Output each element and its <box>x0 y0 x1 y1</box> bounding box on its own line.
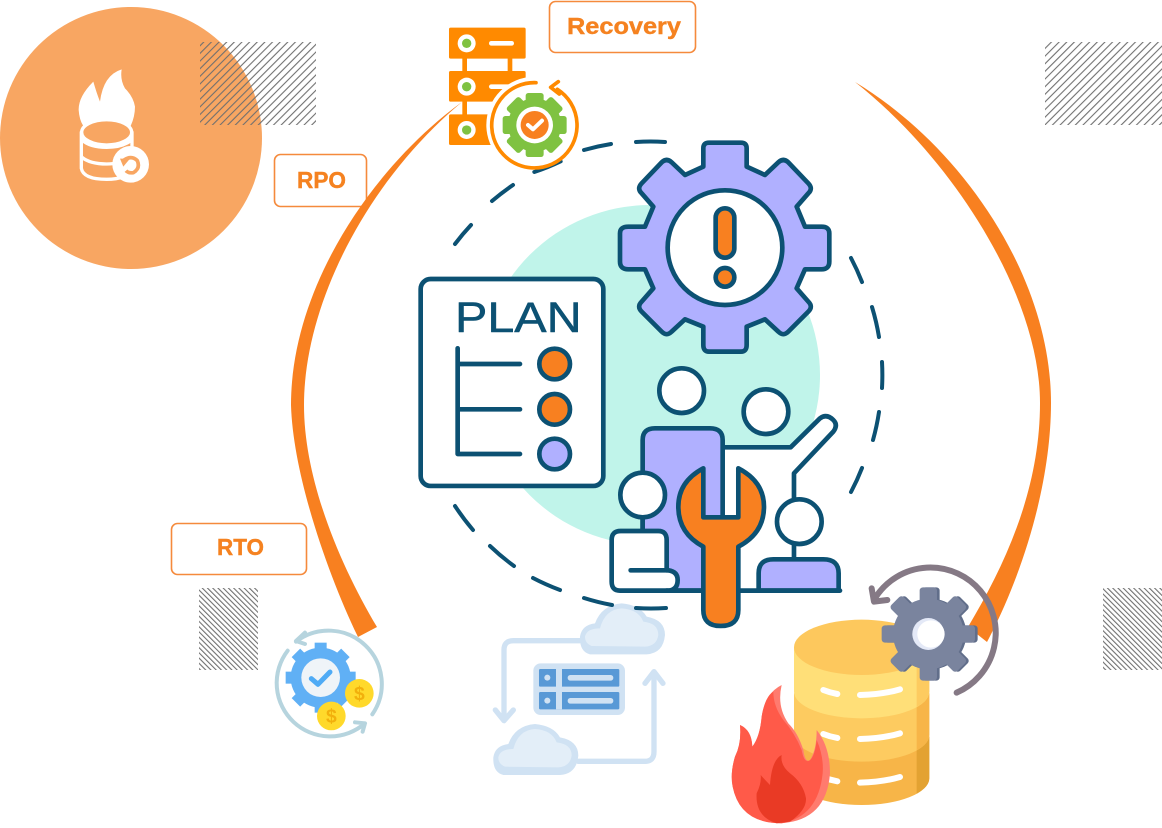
icon: wrench <box>678 468 764 626</box>
label: RTO: RTO <box>217 534 264 560</box>
seated person left <box>612 473 678 591</box>
recovery arrow ring <box>492 82 577 168</box>
teal background circle <box>480 205 820 545</box>
cycle arrows <box>495 641 663 761</box>
dashed circle <box>455 142 882 608</box>
seated person right <box>759 499 839 591</box>
label: RPO: RPO <box>297 167 346 193</box>
coin: $ <box>354 684 365 705</box>
label: Recovery: Recovery <box>567 13 681 39</box>
server stack <box>533 663 625 715</box>
lower cloud <box>493 724 578 775</box>
left orange crescent arc <box>291 102 462 637</box>
icon: server with recovery gear <box>449 28 583 173</box>
icon: burning database with restore arrow <box>79 69 149 183</box>
label: RTO <box>172 524 306 574</box>
plan checklist panel <box>421 279 603 486</box>
label: RPO <box>274 154 366 206</box>
heading: PLAN: PLAN <box>455 294 582 342</box>
presenter with raised arm <box>723 389 836 591</box>
grey gear <box>882 587 978 681</box>
coin: $ <box>326 707 337 728</box>
green gear with check <box>503 93 567 157</box>
icon: cloud backup cycle <box>493 603 665 775</box>
icon: database with gear and flame <box>732 568 996 823</box>
team of people with wrench <box>612 368 840 626</box>
flame <box>732 685 830 823</box>
right orange crescent arc <box>855 82 1051 642</box>
circle badge with database and flame icon <box>0 7 262 269</box>
rotation arrow <box>872 568 996 693</box>
upper cloud <box>580 603 665 654</box>
icon: gear with coins and cycle <box>277 631 382 736</box>
database cylinder <box>794 620 929 805</box>
blue gear <box>286 643 356 713</box>
tall person <box>643 368 723 591</box>
dash passing behind ring <box>534 161 561 172</box>
label: Recovery <box>550 2 696 52</box>
icon: warning gear <box>620 143 829 352</box>
